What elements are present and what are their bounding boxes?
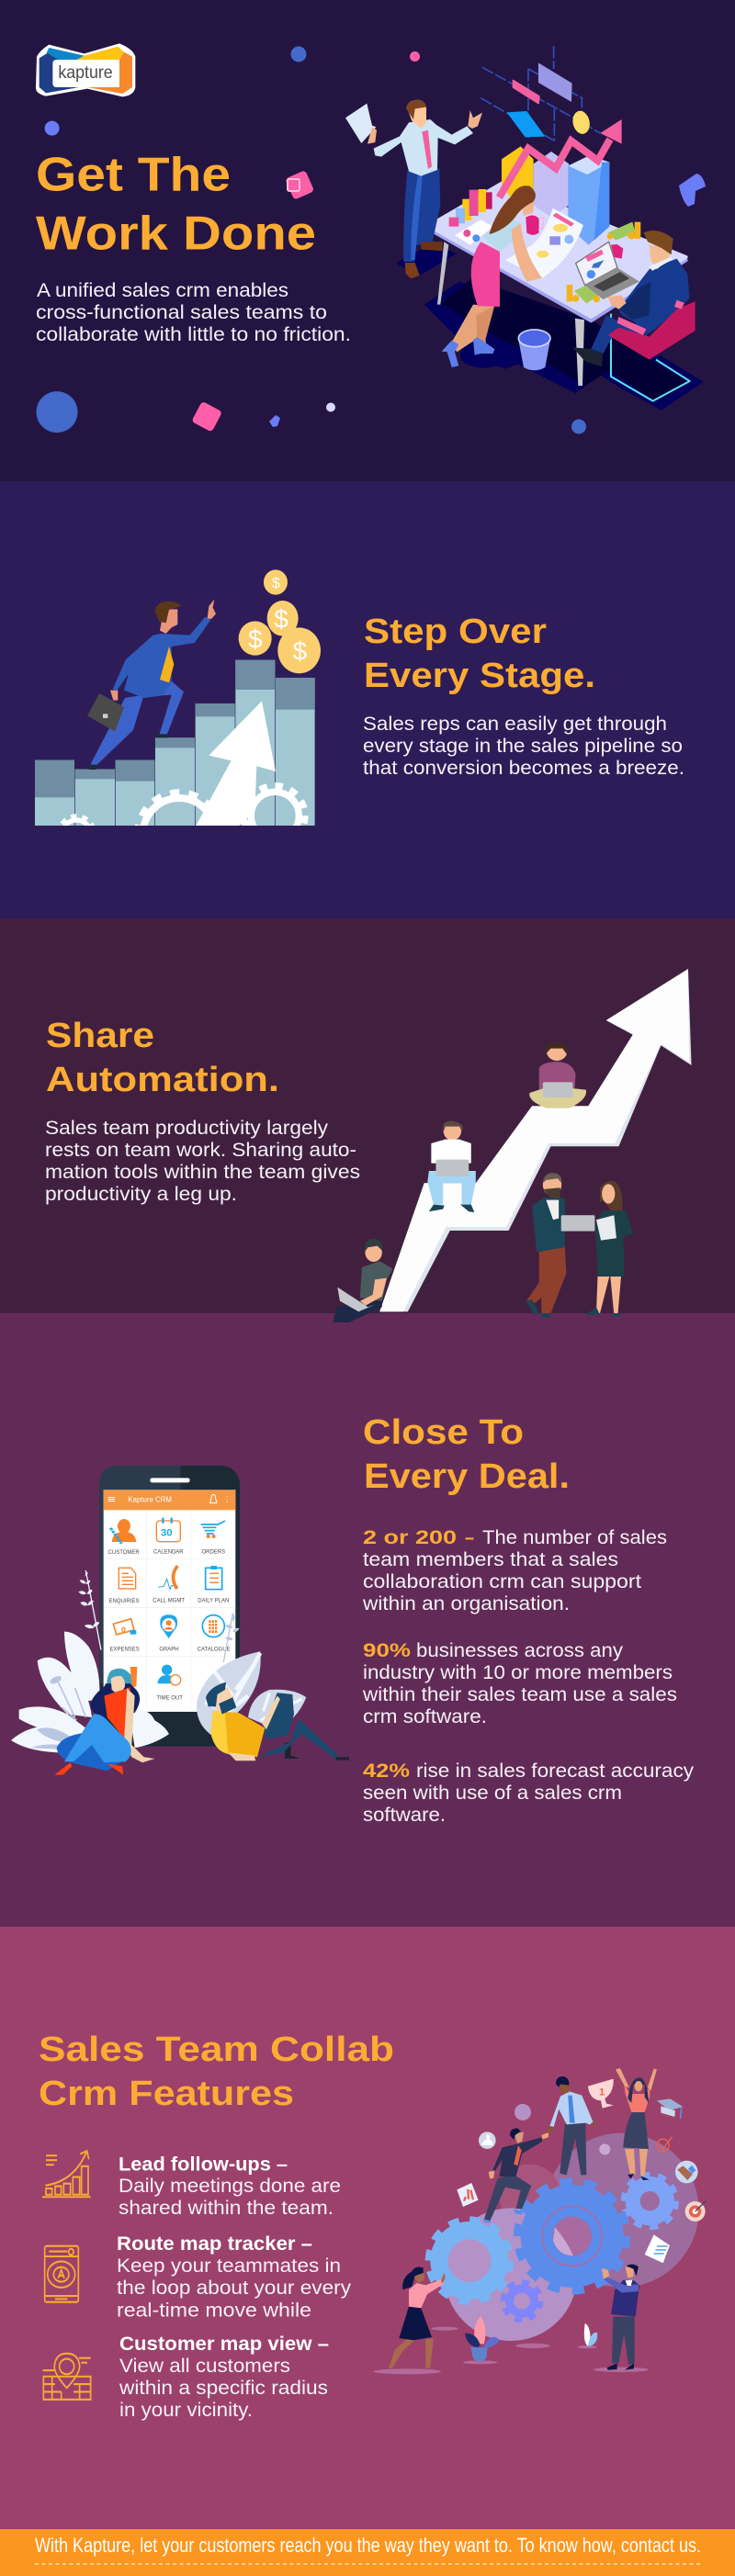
text block: Sales reps can easily get through	[363, 714, 667, 735]
text block: intro: collaborate with little to no friction.	[36, 324, 351, 345]
text block: that conversion becomes a breeze.	[363, 758, 684, 779]
figure: woman cheering	[616, 2068, 657, 2180]
illustration: phone with people	[11, 1466, 349, 1775]
figure: standing man	[345, 100, 482, 278]
bar steps	[35, 660, 315, 826]
heading	[364, 613, 595, 695]
title: Get The	[36, 149, 231, 202]
phone: CATALOGUE	[198, 1647, 231, 1652]
stat: 90%: industry with 10 or more members	[363, 1662, 673, 1683]
table	[429, 183, 686, 386]
flow diagram	[481, 46, 600, 141]
illustration: team with gears	[374, 2068, 706, 2374]
figure: woman leaning	[442, 186, 542, 367]
icon: bin	[518, 330, 550, 370]
phone: GRAPH	[159, 1647, 179, 1652]
illustration: rising arrow with team	[333, 969, 692, 1322]
text: route map tracker: Keep your teammates in	[117, 2255, 341, 2277]
heading: Close To	[363, 1413, 524, 1452]
stat: 90%: 90%	[363, 1640, 411, 1661]
text block: mation tools within the team gives	[45, 1162, 360, 1183]
figure: man lifting gear	[602, 2265, 639, 2370]
illustration: team around table	[345, 46, 704, 411]
text block: intro	[36, 280, 351, 345]
bar columns and arrow	[449, 119, 622, 245]
coins: $	[274, 604, 288, 633]
background circles	[374, 2104, 699, 2374]
figure: man with laptop bottom	[333, 1239, 393, 1322]
text block: intro: A unified sales crm enables	[37, 280, 288, 301]
heading	[363, 1413, 570, 1496]
stat: 2 or 200: collaboration crm can support	[363, 1571, 641, 1592]
phone: 30	[161, 1528, 173, 1539]
table items	[455, 208, 640, 304]
coins: $	[272, 576, 280, 591]
stat: 2 or 200: The number of sales	[482, 1527, 667, 1548]
stat: 90%: within their sales team use a sales	[362, 1684, 677, 1705]
coins: $	[293, 637, 308, 666]
title: Work Done	[36, 208, 316, 261]
laptop	[561, 1215, 594, 1232]
phone: ENQUIRIES	[109, 1599, 139, 1604]
panel: share automation	[0, 918, 735, 1313]
title	[36, 149, 316, 261]
phone: 0	[121, 1625, 126, 1634]
heading: Every Deal.	[364, 1457, 570, 1496]
heading: Crm Features	[39, 2075, 294, 2113]
icon: laptop	[576, 242, 639, 299]
text: route map tracker: the loop about your every	[117, 2278, 352, 2299]
arrow	[196, 701, 276, 826]
stat: 90%: crm software.	[363, 1706, 487, 1727]
text: lead follow-ups	[119, 2154, 341, 2219]
stat: 42%: software.	[363, 1805, 446, 1826]
icon: customer map view	[43, 2354, 91, 2400]
phone: Kapture CRM	[128, 1496, 172, 1504]
small icons	[457, 2079, 706, 2263]
gears	[429, 2176, 675, 2320]
panel: hero	[0, 0, 735, 481]
phone: CALENDAR	[153, 1550, 184, 1556]
figure: climbing man	[87, 600, 216, 770]
text: customer map view: in your vicinity.	[119, 2400, 253, 2421]
coins	[239, 569, 321, 673]
heading: Every Stage.	[364, 657, 595, 695]
plants	[11, 1570, 306, 1752]
text: customer map view: within a specific radius	[119, 2378, 328, 2399]
heading: Automation.	[46, 1061, 279, 1099]
phone	[99, 1466, 240, 1747]
text block: Sales team productivity largely	[45, 1118, 329, 1139]
figure: man with laptop top	[529, 1042, 586, 1108]
panel: close to every deal	[0, 1313, 735, 1927]
panel: step over every stage	[0, 481, 735, 918]
icon: lead growth chart	[42, 2151, 91, 2197]
panel: sales team collab crm features	[0, 1927, 735, 2529]
figure: seated man and chair	[572, 231, 695, 401]
decorative dots and shapes	[37, 46, 706, 433]
arrow	[379, 969, 692, 1311]
text: customer map view	[119, 2334, 329, 2421]
heading	[46, 1017, 279, 1099]
figure: woman with blue trousers	[54, 1667, 154, 1775]
text block	[363, 714, 684, 779]
logo: kapture: kapture	[58, 63, 113, 83]
text: lead follow-ups: Daily meetings done are	[119, 2176, 341, 2197]
text: customer map view: View all customers	[119, 2356, 290, 2377]
stat: 42%	[363, 1760, 695, 1826]
heading: Sales Team Collab	[39, 2030, 394, 2069]
phone: CALL MGMT	[153, 1599, 185, 1604]
figure: man at top	[546, 2076, 599, 2175]
phone: DAILY PLAN	[198, 1598, 229, 1603]
stat: 42%: rise in sales forecast accuracy	[416, 1760, 695, 1782]
footer banner	[0, 2529, 735, 2576]
stat: 2 or 200: team members that a sales	[363, 1549, 618, 1570]
stat: 90%	[362, 1640, 677, 1727]
icon: route map tracker	[45, 2246, 78, 2302]
stat: 2 or 200: within an organisation.	[362, 1593, 570, 1614]
text: lead follow-ups: shared within the team.	[119, 2198, 334, 2219]
text block: productivity a leg up.	[45, 1184, 237, 1205]
text block: intro: cross-functional sales teams to	[36, 302, 327, 323]
phone: CUSTOMER	[108, 1550, 140, 1556]
text: customer map view: Customer map view –	[119, 2334, 329, 2355]
text: route map tracker	[117, 2233, 352, 2322]
phone: ORDERS	[202, 1549, 225, 1555]
heading: Step Over	[364, 613, 547, 651]
text: lead follow-ups: Lead follow-ups –	[119, 2154, 288, 2175]
heading	[39, 2030, 394, 2113]
phone: TIME OUT	[156, 1695, 183, 1701]
illustration: climbing man on bars	[35, 569, 321, 826]
plants	[465, 2316, 597, 2362]
figure: man in yellow jumper	[206, 1682, 349, 1760]
stat: 42%: 42%	[363, 1760, 410, 1782]
small icons: 1	[599, 2087, 605, 2098]
figure: woman pushing gear	[389, 2267, 446, 2368]
text: route map tracker: Route map tracker –	[117, 2233, 312, 2255]
stat: 42%: seen with use of a sales crm	[363, 1783, 622, 1804]
coins: $	[248, 624, 263, 653]
text block	[45, 1118, 360, 1205]
text block: rests on team work. Sharing auto-	[45, 1140, 356, 1161]
stat: 2 or 200	[362, 1527, 667, 1614]
gears	[61, 782, 309, 826]
stat: 2 or 200: 2 or 200	[363, 1527, 457, 1548]
phone: EXPENSES	[110, 1648, 140, 1653]
stat: 2 or 200: –	[465, 1527, 474, 1548]
logo: kapture	[36, 43, 135, 96]
figure: bearded man	[526, 1173, 566, 1318]
figure: woman with documents	[586, 1181, 633, 1317]
figure: man with laptop middle	[427, 1121, 476, 1212]
stat: 90%: businesses across any	[416, 1640, 624, 1661]
figure: man climbing	[483, 2128, 548, 2223]
text: route map tracker: real-time move while	[117, 2300, 311, 2322]
text block: every stage in the sales pipeline so	[363, 736, 683, 757]
heading: Share	[46, 1017, 154, 1055]
